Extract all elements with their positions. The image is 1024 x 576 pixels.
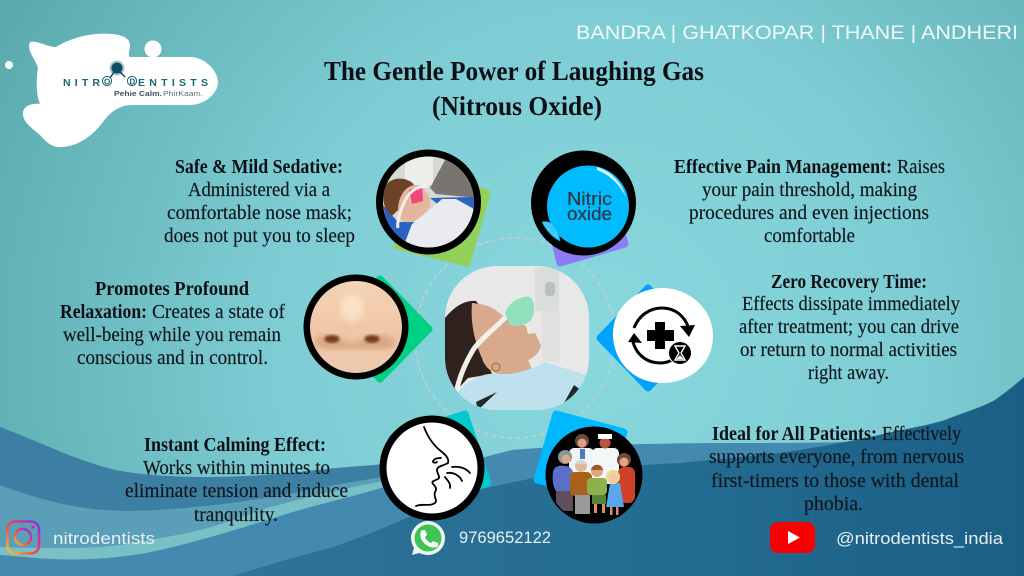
logo: ENTISTS: [138, 77, 208, 89]
text: ideal for all patients: first-timers to those with dental: [711, 471, 960, 492]
text: zero recovery time: Effects dissipate immediately: [742, 294, 960, 315]
text: ideal for all patients: Ideal for All Patients:: [712, 424, 877, 445]
icon: nose: [304, 274, 429, 380]
text: ideal for all patients: supports everyone, from nervous: [709, 447, 964, 468]
title: [324, 56, 704, 121]
instagram handle: nitrodentists: [53, 530, 155, 548]
text: instant calming effect: Instant Calming Effect:: [144, 435, 326, 456]
whatsapp contact: [411, 521, 551, 555]
text: safe and mild sedative: Safe & Mild Sedative:: [175, 157, 343, 178]
text: effective pain management: Raises: [897, 157, 945, 178]
logo: NITR: [63, 77, 100, 89]
text: safe and mild sedative: does not put you to sleep: [164, 226, 355, 247]
text: zero recovery time: [739, 272, 960, 384]
text: effective pain management: Effective Pain Management:: [674, 157, 892, 178]
central dashed ring: [415, 238, 615, 438]
text: safe and mild sedative: comfortable nose mask;: [167, 203, 352, 224]
text: instant calming effect: [125, 435, 348, 526]
text: promotes profound relaxation: conscious and in control.: [77, 348, 268, 369]
whatsapp contact: 9769652122: [459, 529, 551, 547]
icon: patient with pink nose mask: [376, 150, 487, 263]
text: promotes profound relaxation: Creates a state of: [152, 302, 285, 323]
text: effective pain management: procedures and even injections: [689, 203, 929, 224]
text: ideal for all patients: Effectively: [882, 424, 961, 445]
text: ideal for all patients: phobia.: [804, 494, 863, 515]
instagram handle: [8, 522, 155, 554]
icon: face breathing out: [380, 414, 488, 520]
icon: nitric oxide bubble: Nitric: [567, 189, 612, 209]
youtube handle: @nitrodentists_india: [836, 530, 1004, 548]
icon: recovery cycle with hourglass: [600, 288, 713, 388]
title: (Nitrous Oxide): [432, 91, 602, 121]
text: zero recovery time: after treatment; you can drive: [739, 317, 959, 338]
panel: instant calming effect: [125, 414, 488, 526]
youtube handle: [770, 522, 1004, 553]
logo: [5, 34, 218, 147]
central photo: patient with nasal mask: [445, 266, 589, 410]
logo: PhirKaam.: [163, 89, 203, 98]
panel: safe and mild sedative: [164, 150, 487, 263]
text: instant calming effect: eliminate tension and induce: [125, 481, 348, 502]
text: effective pain management: comfortable: [764, 226, 855, 247]
panel: ideal for all patients: [537, 414, 964, 524]
text: ideal for all patients: [709, 424, 964, 515]
text: promotes profound relaxation: [60, 279, 285, 369]
text: promotes profound relaxation: Promotes Profound: [95, 279, 249, 300]
panel: effective pain management: [531, 150, 945, 263]
logo: O: [104, 78, 110, 86]
text: promotes profound relaxation: Relaxation:: [60, 302, 147, 323]
text: promotes profound relaxation: well-being while you remain: [63, 325, 281, 346]
icon: nitric oxide bubble: oxide: [567, 204, 612, 224]
text: zero recovery time: right away.: [808, 363, 889, 384]
panel: promotes profound relaxation: [60, 274, 429, 380]
icon: family group with doctors: [537, 414, 642, 524]
text: effective pain management: your pain threshold, making: [702, 180, 917, 201]
text: effective pain management: [674, 157, 945, 247]
text: instant calming effect: tranquility.: [194, 505, 278, 526]
text: zero recovery time: or return to normal activities: [740, 340, 957, 361]
icon: nitric oxide bubble: [531, 150, 636, 263]
panel: zero recovery time: [600, 272, 960, 388]
logo: D: [130, 78, 136, 86]
title: The Gentle Power of Laughing Gas: [324, 56, 704, 86]
text: zero recovery time: Zero Recovery Time:: [771, 272, 927, 293]
text: instant calming effect: Works within minutes to: [143, 458, 330, 479]
text: safe and mild sedative: Administered via a: [188, 180, 330, 201]
locations header: BANDRA | GHATKOPAR | THANE | ANDHERI: [576, 22, 1018, 44]
text: safe and mild sedative: [164, 157, 355, 247]
logo: Pehie Calm.: [114, 89, 162, 98]
